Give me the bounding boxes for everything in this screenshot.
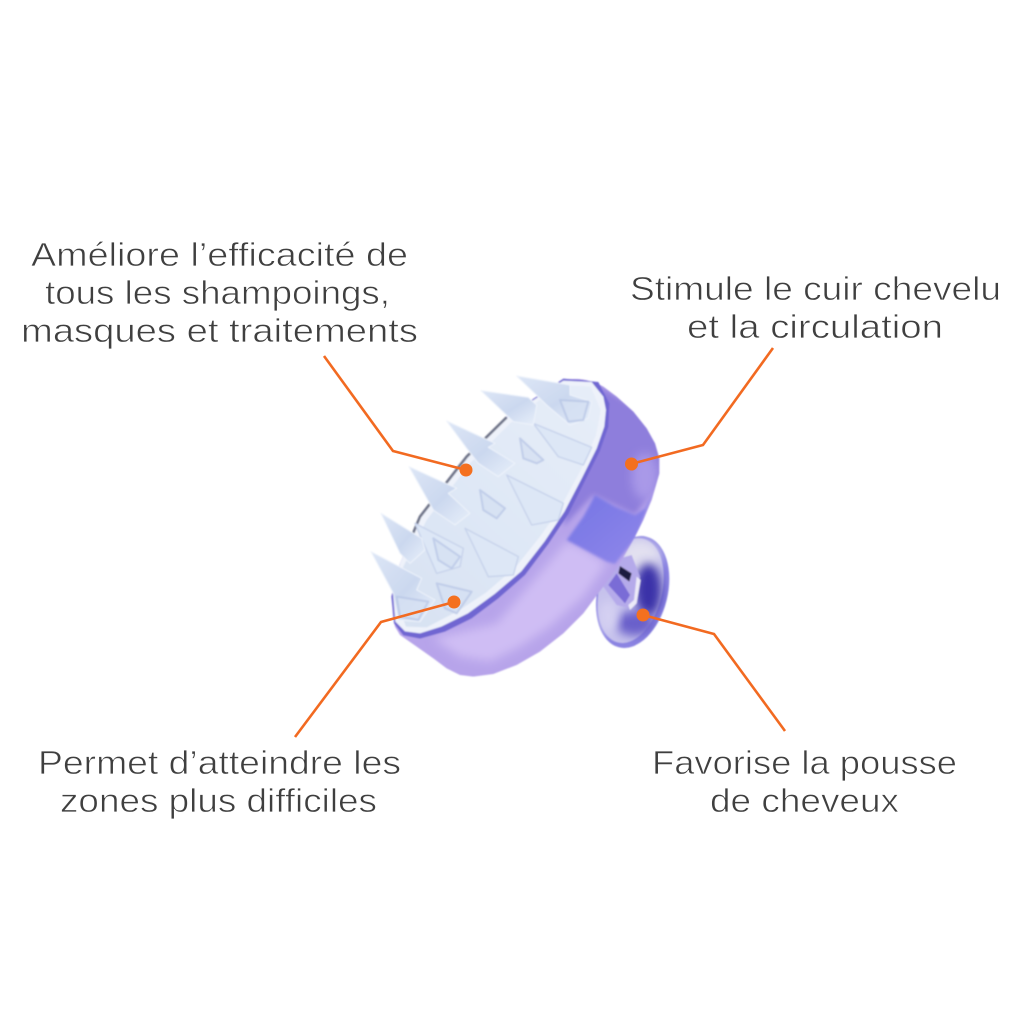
callout text: zones difficiles: Permet d’atteindre les: [38, 744, 401, 781]
brush handle: round knob and stem: [595, 535, 670, 649]
brush face: clear plate with rim: [391, 379, 609, 639]
callout text: zones difficiles: zones plus difficiles: [60, 782, 377, 819]
illustration: scalp massage brush: [371, 373, 680, 683]
callout text: efficacité: tous les shampoings,: [45, 274, 390, 311]
marker dot: lower bristles: [448, 596, 460, 608]
brush body: lavender metallic shell: [383, 373, 670, 683]
leader line: to handle: [643, 615, 785, 731]
callout: top left: [21, 236, 472, 476]
callout text: efficacité: [21, 236, 418, 349]
callout text: stimulation: et la circulation: [687, 308, 943, 345]
callout text: pousse: [652, 744, 957, 819]
callout: bottom right: [636, 608, 957, 819]
callout text: zones difficiles: [38, 744, 401, 819]
body: upper satin band: [562, 378, 660, 526]
callout text: efficacité: Améliore l’efficacité de: [31, 236, 408, 273]
body: blue reflection: [567, 492, 653, 564]
callout: top right: [625, 270, 1001, 470]
callout text: efficacité: masques et traitements: [21, 312, 418, 349]
leader line: to bristles: [324, 356, 466, 470]
callout text: stimulation: Stimule le cuir chevelu: [630, 270, 1001, 307]
body: pale lower highlight: [433, 542, 607, 662]
callout text: stimulation: [630, 270, 1001, 345]
leader line: to body: [631, 348, 773, 464]
marker dot: body: [625, 458, 638, 470]
leader line: to lower bristles: [295, 602, 454, 737]
marker dot: bristles: [460, 464, 472, 476]
callout text: pousse: Favorise la pousse: [652, 744, 957, 781]
callout: bottom left: [38, 596, 460, 819]
brush bristles: translucent spikes: [371, 376, 592, 622]
callout text: pousse: de cheveux: [710, 782, 900, 819]
marker dot: handle: [636, 608, 650, 622]
